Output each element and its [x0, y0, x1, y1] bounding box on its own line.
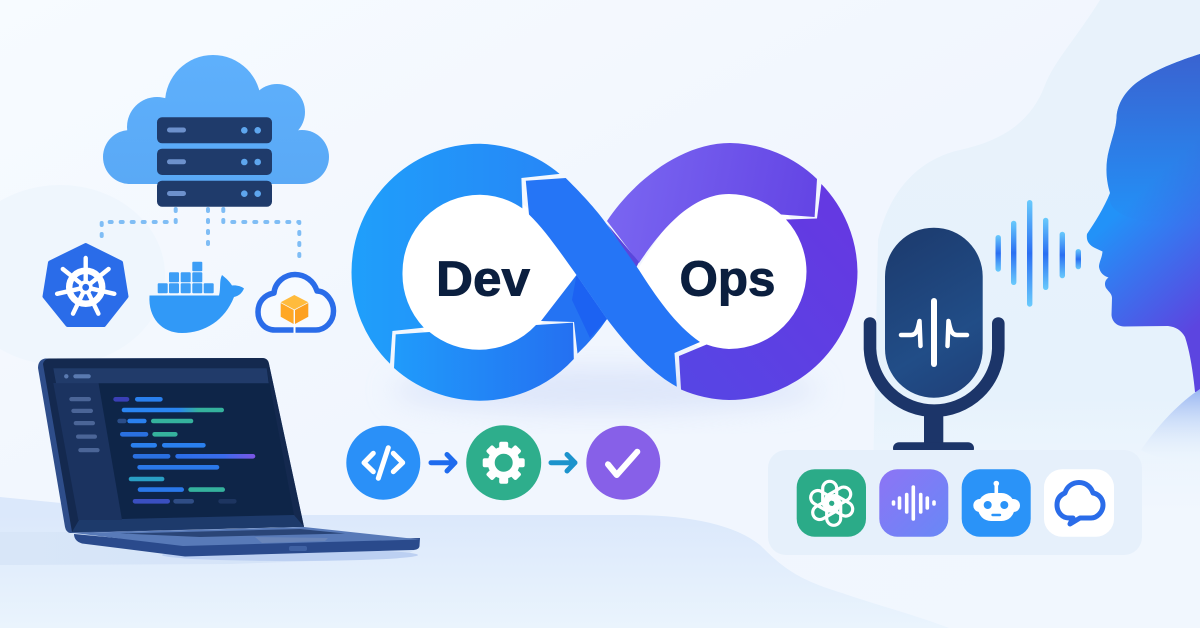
sidebar — [53, 383, 122, 520]
laptop — [38, 358, 420, 561]
icon: docker whale — [149, 262, 244, 333]
icon: sound waves — [996, 200, 1081, 307]
ring segment: Dev lower — [394, 323, 574, 401]
infinity loop: DevOps — [352, 143, 858, 412]
icon: cloud with box — [258, 274, 334, 333]
icon: cloud — [103, 55, 329, 184]
icon: speaking head silhouette — [1087, 54, 1200, 462]
ring segment: lower strand to crossing — [541, 275, 607, 354]
white inner area: Ops — [637, 190, 811, 354]
ring segment: Dev upper — [352, 144, 560, 364]
mic waveform — [901, 301, 967, 364]
screen — [53, 368, 294, 520]
panel: AI assistants — [768, 450, 1142, 555]
crossing shadow — [572, 275, 607, 338]
white inner area: Dev — [399, 192, 578, 354]
sidebar items — [69, 397, 100, 452]
cloud server group — [102, 55, 329, 262]
dotted connector lines — [102, 209, 299, 262]
pipeline steps — [346, 425, 660, 500]
arrow: code to build — [431, 454, 455, 471]
label: Dev: Dev — [436, 252, 531, 306]
ring segment: Ops lower — [679, 184, 858, 400]
laptop shadow — [162, 549, 418, 561]
icon: microphone — [870, 228, 998, 454]
laptop lid — [38, 358, 304, 533]
icon: gear step — [466, 425, 541, 500]
title bar — [53, 368, 269, 383]
icon: robot tile — [962, 469, 1031, 537]
loop shadow — [390, 368, 820, 412]
label: Ops: Ops — [680, 252, 776, 306]
icon: kubernetes — [44, 245, 126, 325]
crossing band — [526, 178, 700, 387]
arrow: build to verify — [551, 454, 575, 471]
crossing shade on purple — [607, 224, 639, 268]
shoulder — [1141, 389, 1200, 462]
icon: server stack — [157, 117, 272, 207]
code lines — [113, 397, 255, 504]
icon: knot logo tile — [797, 469, 866, 537]
icon: code step — [346, 426, 420, 500]
icon: check step — [586, 426, 660, 500]
ring segment: Ops upper — [607, 143, 817, 263]
laptop base — [74, 534, 420, 556]
icon: audio tile — [879, 469, 948, 537]
icon: chat cloud tile — [1044, 469, 1114, 537]
